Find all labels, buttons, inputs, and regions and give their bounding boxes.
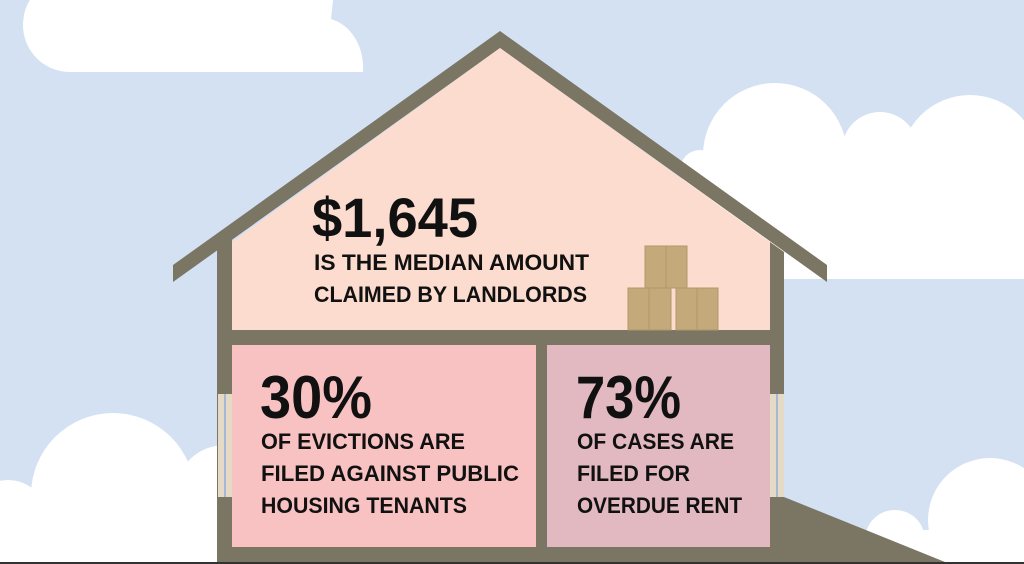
- text: left room stat: [260, 364, 519, 518]
- text: attic stat: $1,645: [312, 186, 478, 249]
- roof: [173, 31, 827, 282]
- text: left room stat: 30%: [260, 364, 372, 431]
- text: attic stat: [312, 186, 590, 307]
- room: right: [547, 345, 770, 547]
- cloud: bottom left: [0, 413, 275, 564]
- icon: boxes: [628, 246, 718, 330]
- text: right room stat: 73%: [576, 364, 681, 431]
- text: left room stat: OF EVICTIONS ARE: [261, 429, 465, 454]
- window: right: [770, 394, 784, 497]
- house: [173, 31, 827, 562]
- text: right room stat: [576, 364, 743, 518]
- walls: [217, 240, 232, 562]
- bottom strip: [0, 562, 1024, 564]
- text: left room stat: FILED AGAINST PUBLIC: [261, 461, 519, 486]
- text: right room stat: OF CASES ARE: [577, 429, 734, 454]
- text: attic stat: CLAIMED BY LANDLORDS: [314, 282, 587, 307]
- cloud: bottom right: [865, 458, 1024, 564]
- text: attic stat: IS THE MEDIAN AMOUNT: [314, 250, 590, 275]
- room: left: [232, 345, 536, 547]
- cloud: right: [680, 83, 1024, 279]
- text: right room stat: FILED FOR: [577, 461, 690, 486]
- attic fill: [232, 48, 770, 330]
- text: left room stat: HOUSING TENANTS: [261, 493, 467, 518]
- window: left: [218, 394, 232, 497]
- ground slope: [784, 497, 945, 562]
- cloud: top left: [23, 0, 363, 72]
- text: right room stat: OVERDUE RENT: [577, 493, 743, 518]
